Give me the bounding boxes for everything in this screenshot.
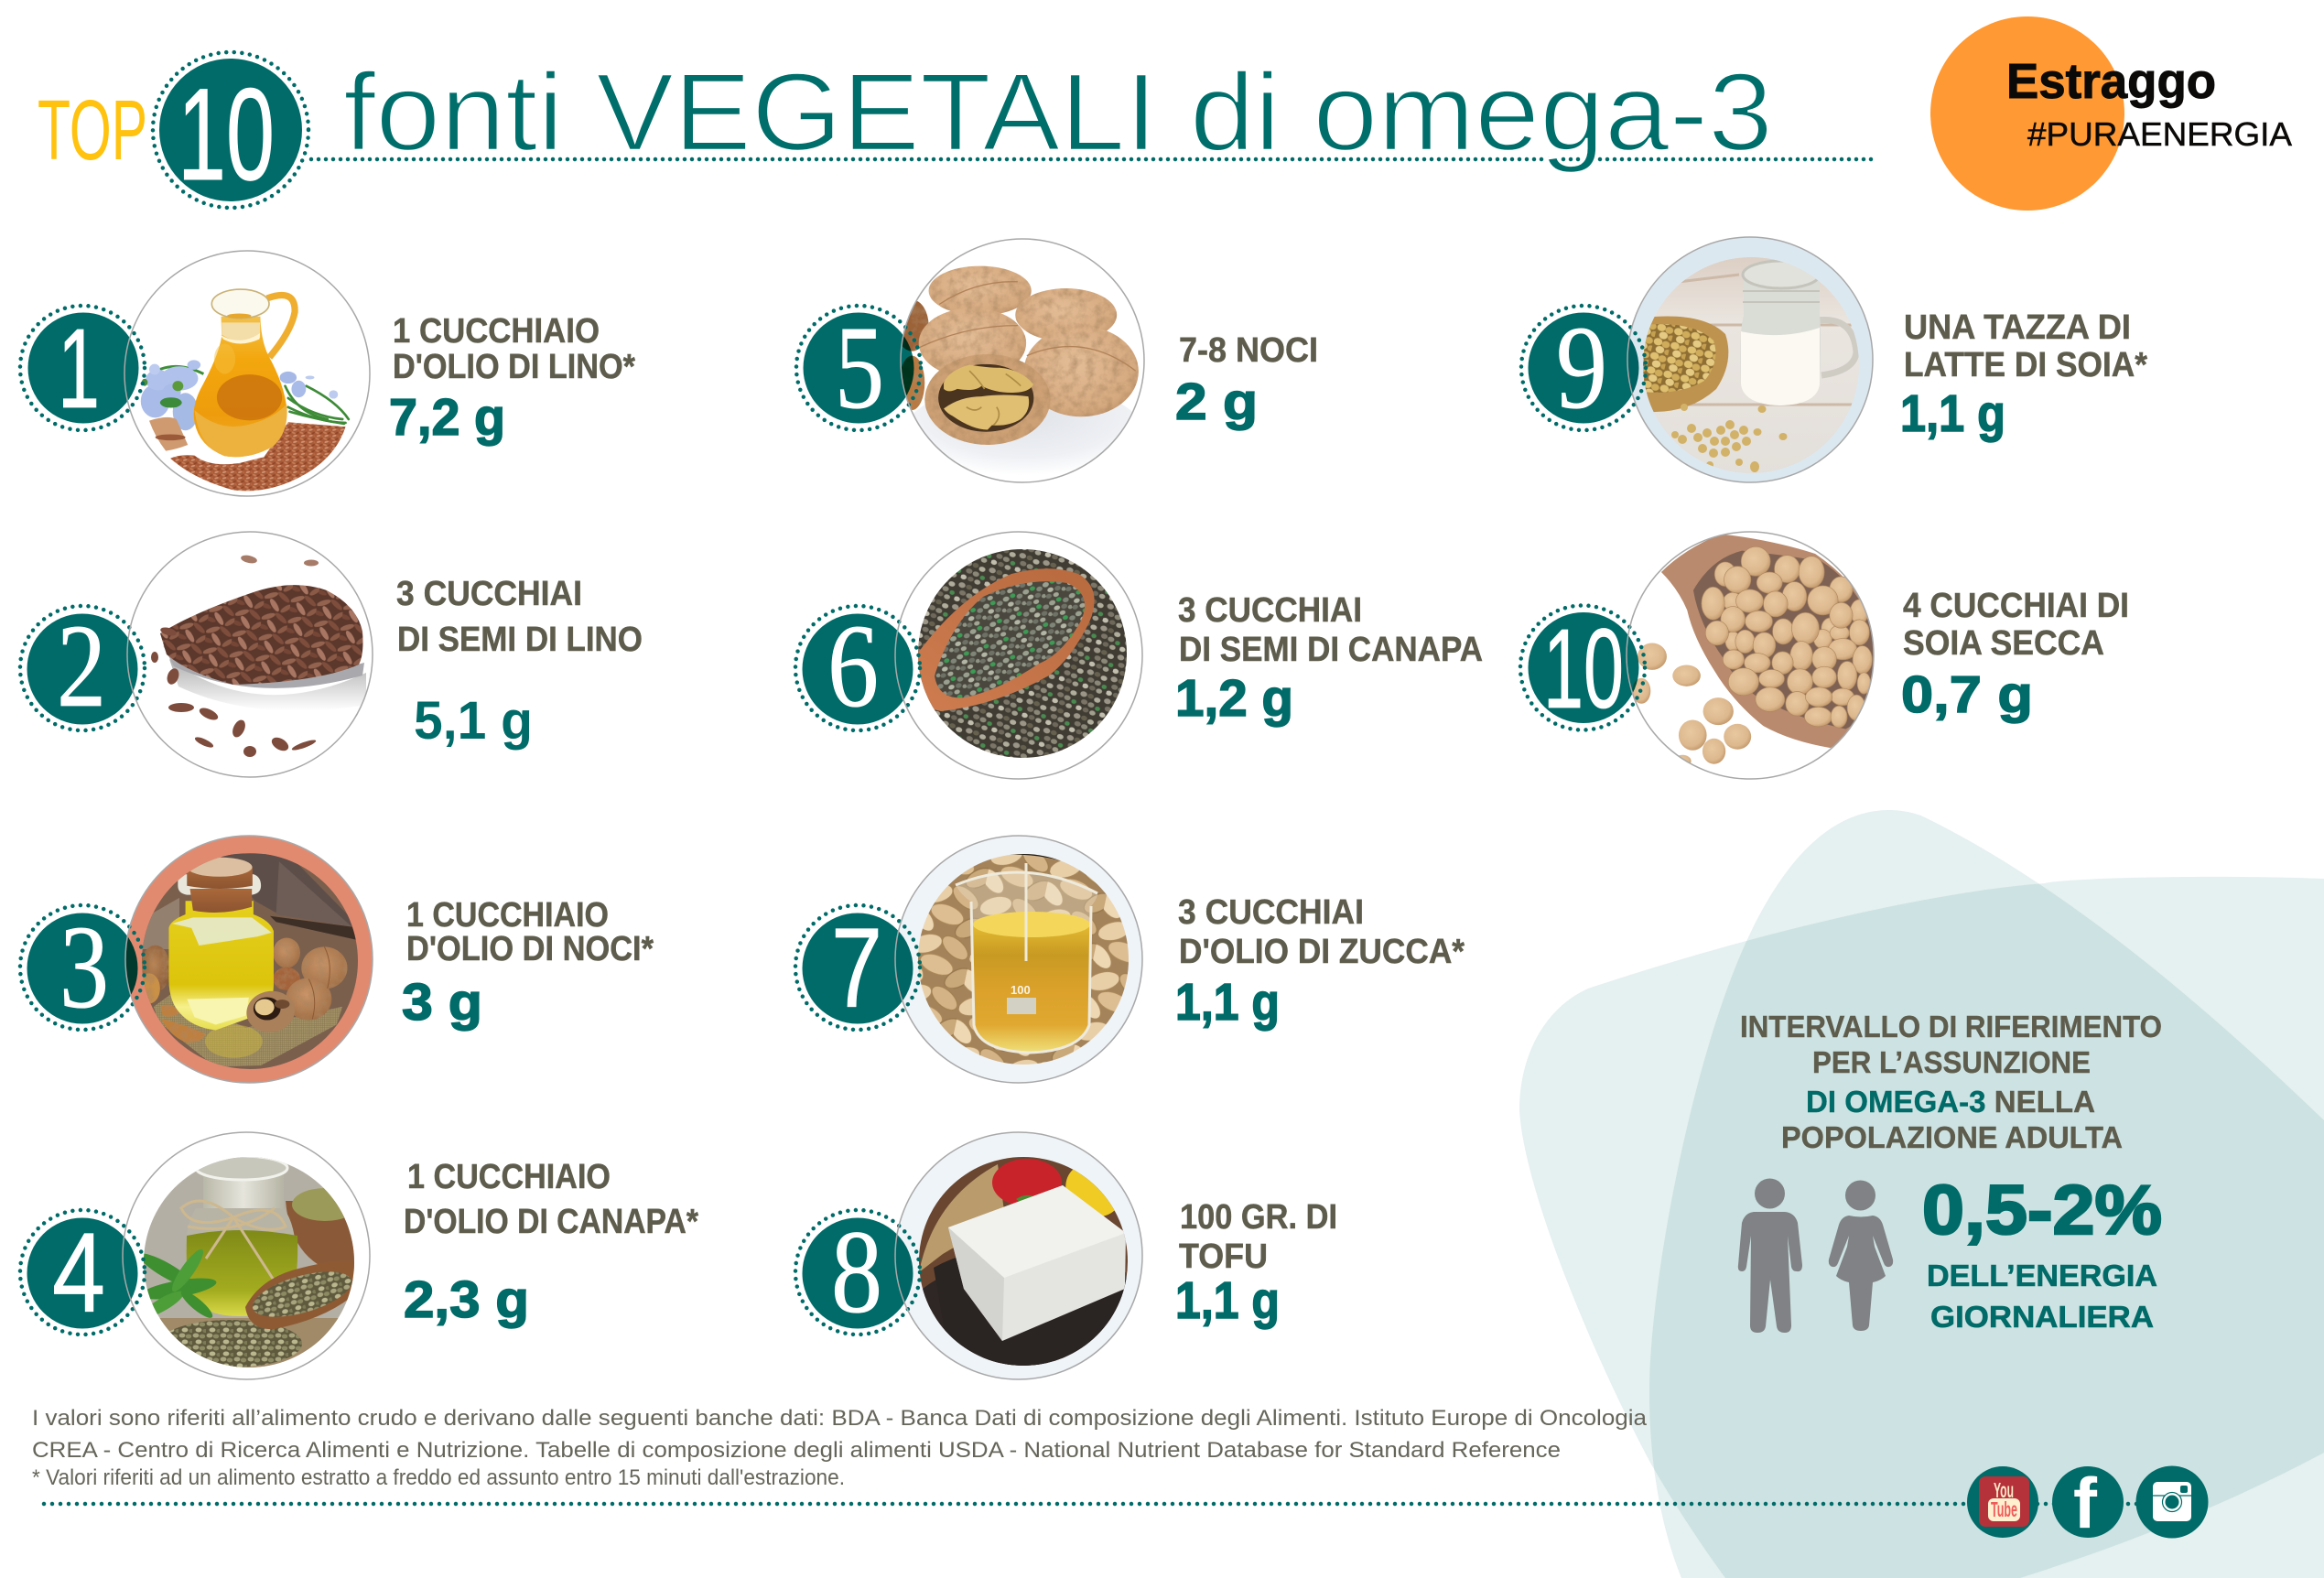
item 10: soia secca [1520, 532, 2129, 779]
label 4: D'OLIO DI CANAPA* [404, 1203, 698, 1241]
label 8: 100 GR. DI [1180, 1198, 1337, 1237]
photo: flax seeds on plate [151, 554, 366, 757]
number badge 3 [20, 836, 373, 1083]
label 3 [406, 896, 654, 968]
label 6: DI SEMI DI CANAPA [1179, 631, 1483, 669]
photo: hemp oil jar [144, 1157, 354, 1367]
percentage: 0,5-2% [1922, 1172, 2162, 1249]
heading: INTERVALLO DI RIFERIMENTO [1740, 1010, 2162, 1043]
value 2: 5,1 g [414, 691, 533, 751]
badge: top 10: 10 [178, 62, 275, 208]
item 8: tofu [795, 1132, 1337, 1379]
label 8 [1179, 1198, 1337, 1276]
label 1: 1 CUCCHIAIO [393, 312, 600, 351]
item 6: semi di canapa [795, 532, 1483, 779]
item 4: olio di canapa [20, 1132, 698, 1379]
label 10 [1903, 587, 2129, 663]
item 3: olio di noci [20, 836, 654, 1083]
footer dotted rule [44, 1502, 2137, 1506]
label 2 [396, 575, 643, 659]
item 5: noci [796, 239, 1318, 485]
photo: soy milk jar and bowl [1627, 237, 1873, 482]
logo: Estraggo [2006, 54, 2216, 109]
icon: youtube [1967, 1466, 2038, 1538]
value 3: 3 g [402, 973, 482, 1032]
photo: flaxseed oil jug [141, 289, 349, 491]
photo: tofu block [895, 1132, 1153, 1379]
label 3: 1 CUCCHIAIO [406, 896, 609, 935]
icon: woman [1829, 1181, 1893, 1331]
icon: youtube: Tube [1991, 1497, 2017, 1521]
header [38, 49, 1874, 208]
number badge 4 [20, 1132, 370, 1379]
heading: POPOLAZIONE ADULTA [1781, 1120, 2123, 1154]
footnotes: CREA - Centro di Ricerca Alimenti e Nutrizione. Tabelle di composizione degli alimenti USDA - National Nutrient Database for Standard Reference [32, 1438, 1561, 1463]
energy caption [1927, 1259, 2157, 1334]
value 1: 7,2 g [389, 388, 505, 447]
icon: instagram [2136, 1466, 2208, 1538]
photo: pumpkin seed oil beaker [895, 836, 1142, 1083]
header dotted rule [311, 157, 1874, 161]
number badge 9 [1521, 237, 1873, 482]
label 5: 7-8 NOCI [1179, 331, 1318, 370]
label 3: D'OLIO DI NOCI* [406, 930, 654, 968]
icon: youtube: You [1994, 1478, 2014, 1502]
label 2: DI SEMI DI LINO [397, 621, 643, 659]
icon: facebook: f [2073, 1463, 2098, 1543]
number badge 8 [795, 1132, 1142, 1379]
label 9 [1904, 308, 2147, 384]
label 10: 4 CUCCHIAI DI [1903, 587, 2129, 625]
value 4: 2,3 g [404, 1270, 529, 1329]
value 9: 1,1 g [1900, 384, 2005, 443]
photo: walnuts [902, 265, 1139, 467]
number badge 7 [795, 836, 1142, 1083]
heading [1740, 1010, 2162, 1154]
label 6: 3 CUCCHIAI [1178, 591, 1362, 630]
number badge 6: 6 [827, 600, 879, 732]
label 9: UNA TAZZA DI [1904, 308, 2131, 347]
logo [1930, 16, 2292, 211]
number badge 1 [20, 251, 370, 496]
number badge 6 [795, 532, 1142, 779]
label 2: 3 CUCCHIAI [396, 575, 582, 613]
number badge 10 [1520, 532, 1874, 779]
number badge 8: 8 [831, 1206, 882, 1338]
footnotes: I valori sono riferiti all’alimento crudo e derivano dalle seguenti banche dati: BDA - Banca Dati di composizione degli Alimenti. Istituto Europe di Oncologia [32, 1406, 1648, 1431]
energy caption: GIORNALIERA [1930, 1300, 2154, 1334]
label 6 [1178, 591, 1483, 669]
label 7 [1178, 893, 1465, 971]
number badge 9: 9 [1556, 302, 1607, 434]
number badge 7: 7 [831, 906, 882, 1032]
icon: man [1738, 1179, 1802, 1333]
label 7: D'OLIO DI ZUCCA* [1179, 933, 1465, 971]
label 9: LATTE DI SOIA* [1904, 346, 2147, 384]
number badge 10: 10 [1543, 607, 1624, 732]
label 4: 1 CUCCHIAIO [407, 1158, 611, 1196]
photo: pumpkin seed oil beaker: 100 [1011, 983, 1031, 997]
item 2: semi di lino [20, 532, 643, 777]
heading: PER L’ASSUNZIONE [1812, 1045, 2091, 1079]
footnotes [32, 1406, 1648, 1490]
social icons [1967, 1463, 2208, 1543]
logo: #PURAENERGIA [2027, 115, 2292, 153]
footnotes: * Valori riferiti ad un alimento estratto a freddo ed assunto entro 15 minuti dall'estrazione. [32, 1465, 845, 1490]
item 7: olio di zucca [795, 836, 1465, 1083]
number badge 1: 1 [58, 307, 100, 432]
item 1: olio di lino [20, 251, 635, 496]
title: fonti VEGETALI di omega-3 [343, 49, 1773, 174]
value 8: 1,1 g [1175, 1271, 1280, 1330]
value 7: 1,1 g [1175, 973, 1280, 1032]
energy caption: DELL’ENERGIA [1927, 1259, 2157, 1292]
heading: DI OMEGA-3 NELLA [1806, 1085, 2095, 1119]
icon: facebook [2052, 1463, 2124, 1543]
label 10: SOIA SECCA [1903, 624, 2104, 663]
value 10: 0,7 g [1901, 665, 2033, 724]
label 1 [393, 312, 635, 386]
label 4 [404, 1158, 698, 1241]
photo: soybeans in wooden spoon [1632, 534, 1876, 767]
background blobs [1519, 810, 2324, 1578]
number badge 5 [796, 239, 1144, 482]
number badge 4: 4 [52, 1211, 105, 1336]
top label: TOP [38, 82, 147, 178]
panel: reference intake [1738, 1010, 2162, 1334]
number badge 3: 3 [59, 902, 109, 1033]
label 8: TOFU [1179, 1238, 1268, 1276]
number badge 2 [20, 532, 373, 777]
label 1: D'OLIO DI LINO* [393, 348, 635, 386]
number badge 5: 5 [835, 302, 884, 434]
photo: walnut oil bottle [125, 836, 373, 1083]
photo: hemp seeds with wooden spoon [915, 545, 1135, 764]
number badge 2: 2 [57, 600, 106, 732]
label 7: 3 CUCCHIAI [1178, 893, 1364, 932]
item 9: latte di soia [1521, 237, 2147, 482]
value 6: 1,2 g [1175, 669, 1293, 728]
value 5: 2 g [1175, 373, 1258, 431]
